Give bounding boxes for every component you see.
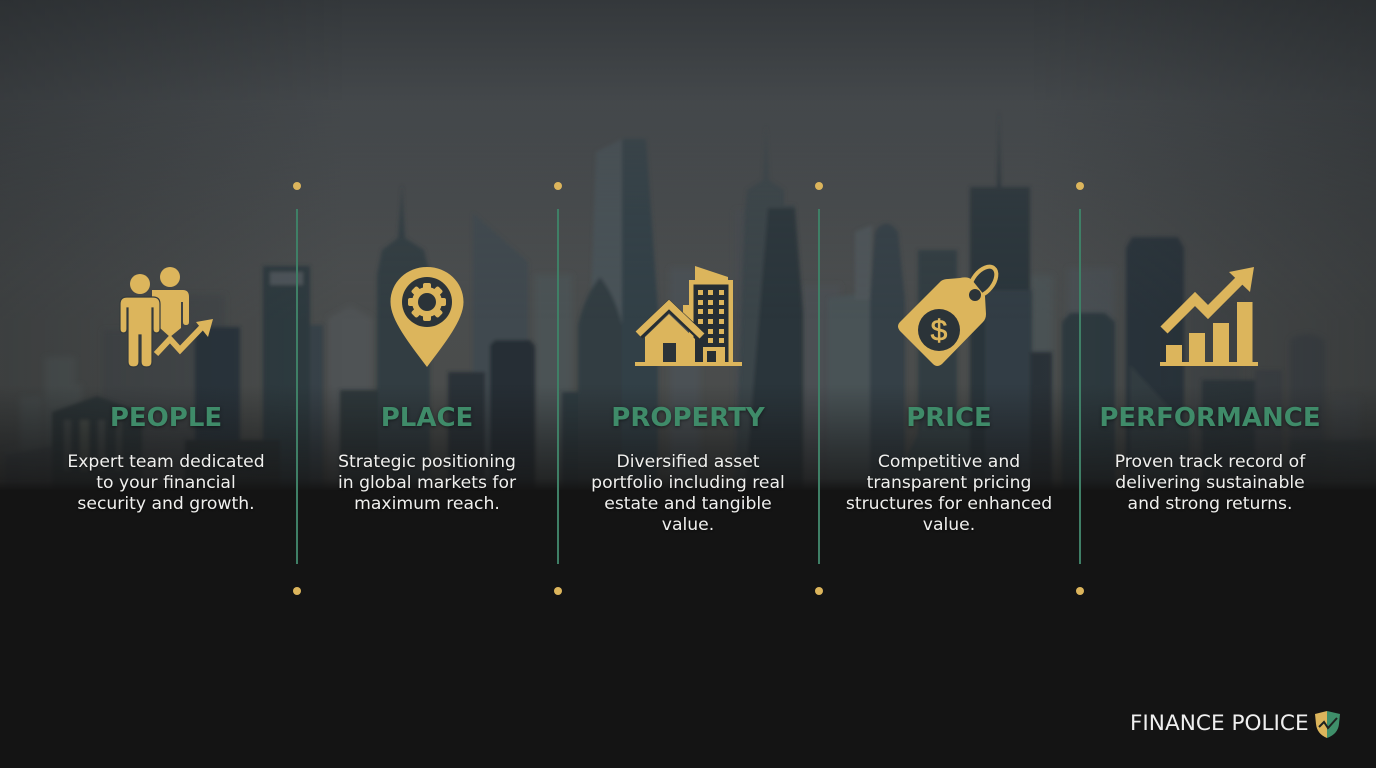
description: portfolio including real	[591, 473, 785, 493]
description	[338, 452, 516, 514]
panel: property	[591, 266, 785, 535]
panel: people	[67, 267, 265, 514]
description: Proven track record of	[1115, 452, 1305, 472]
description: maximum reach.	[354, 494, 500, 514]
heading: PRICE	[906, 403, 992, 433]
description: and strong returns.	[1128, 494, 1292, 514]
divider 3 with dots	[815, 182, 823, 595]
description	[1115, 452, 1306, 514]
icon: price tag: $	[931, 314, 948, 348]
description: to your financial	[96, 473, 236, 493]
description: security and growth.	[77, 494, 255, 514]
description: structures for enhanced	[846, 494, 1052, 514]
icon: house and tower	[635, 266, 742, 366]
divider 2 with dots	[554, 182, 562, 595]
description: in global markets for	[338, 473, 516, 493]
divider 4 with dots	[1076, 182, 1084, 595]
description	[591, 452, 785, 535]
heading: PROPERTY	[611, 403, 765, 433]
description: Competitive and	[878, 452, 1020, 472]
description: estate and tangible	[604, 494, 772, 514]
logo: Finance Police	[1130, 711, 1340, 738]
description: Diversified asset	[616, 452, 760, 472]
description: Expert team dedicated	[67, 452, 265, 472]
panel: place	[338, 267, 516, 514]
icon: bar chart with rising arrow	[1160, 267, 1258, 366]
description	[846, 452, 1052, 535]
icon: people with growth arrow	[120, 267, 213, 368]
logo wordmark: FINANCE POLICE	[1130, 711, 1309, 736]
description: delivering sustainable	[1115, 473, 1305, 493]
icon: map pin with gear	[390, 267, 464, 367]
heading: PEOPLE	[110, 403, 222, 433]
divider 1 with dots	[293, 182, 301, 595]
icon: shield	[1315, 711, 1340, 738]
panel: performance	[1099, 267, 1321, 514]
panel: price	[846, 264, 1052, 535]
heading: PLACE	[381, 403, 473, 433]
description: value.	[662, 515, 714, 535]
description: value.	[923, 515, 975, 535]
icon: price tag	[898, 264, 998, 366]
description: transparent pricing	[867, 473, 1031, 493]
description: Strategic positioning	[338, 452, 516, 472]
description	[67, 452, 265, 514]
heading: PERFORMANCE	[1099, 403, 1321, 433]
